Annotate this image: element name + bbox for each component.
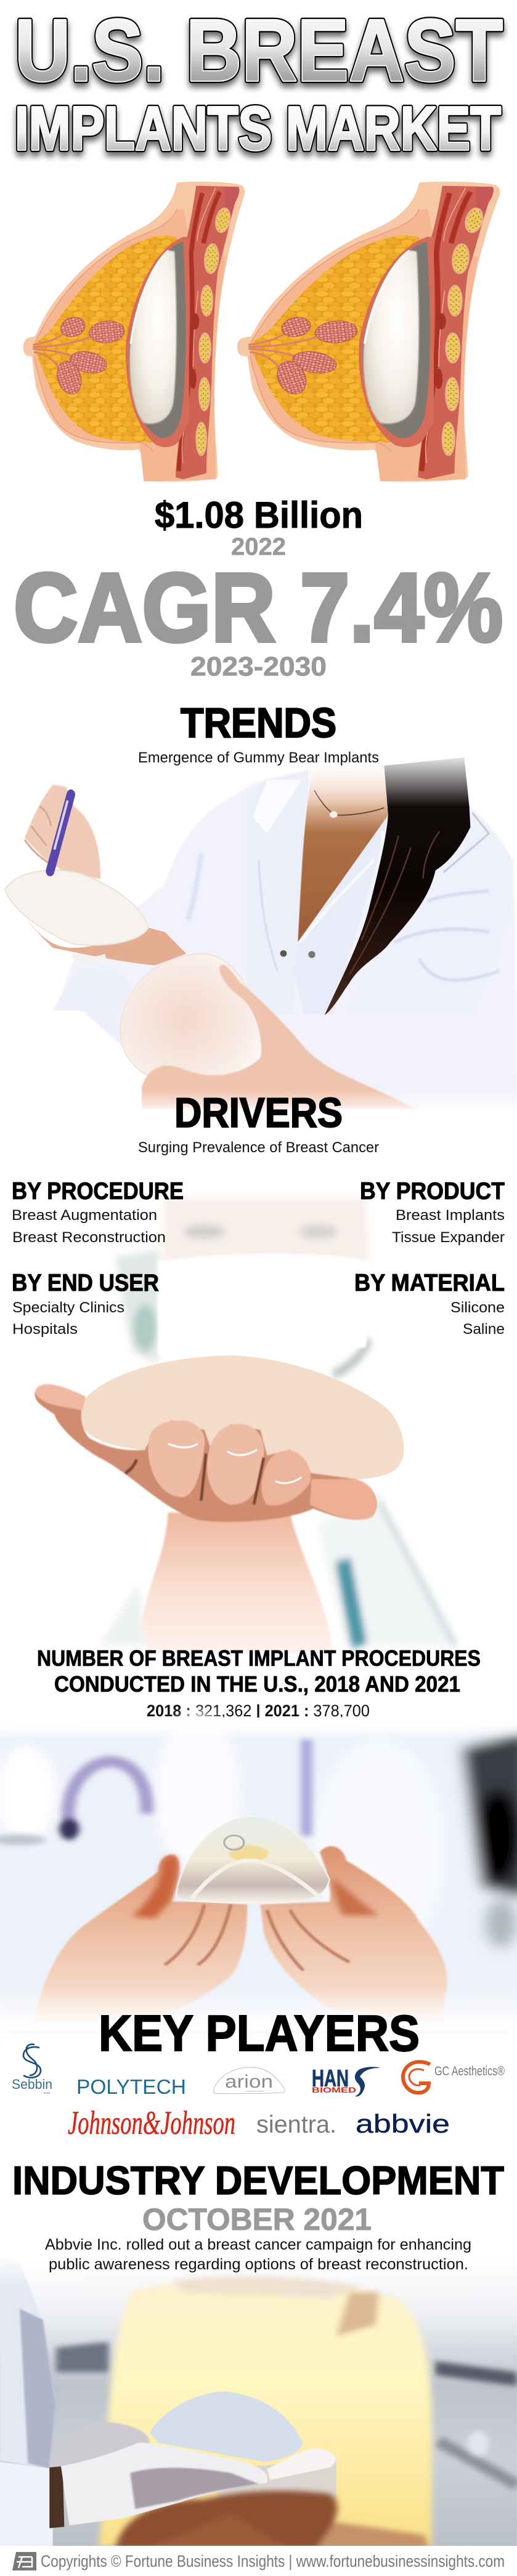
date: october 2021: OCTOBER 2021 <box>142 2202 372 2237</box>
segment: by material: Silicone <box>450 1299 505 1316</box>
segment: by material: Saline <box>463 1321 505 1338</box>
logo: Sebbin: Sebbin <box>12 2077 52 2092</box>
footer <box>12 2552 505 2570</box>
photo: gloved hand presenting implant to patient <box>0 2253 517 2576</box>
heading: industry development: INDUSTRY DEVELOPMENT <box>12 2158 504 2203</box>
icon: Fortune Business Insights logo <box>12 2552 36 2570</box>
heading: trends: TRENDS <box>181 700 336 746</box>
logo: Arion: arion <box>225 2072 273 2092</box>
development description: Abbvie Inc. rolled out a breast cancer campaign for enhancing <box>45 2236 471 2253</box>
logo: Hans Biomed: BIOMED <box>312 2086 357 2094</box>
logo: Arion: LABORATOIRES <box>245 2089 264 2093</box>
segment: by material <box>354 1270 505 1338</box>
heading: number of procedures: CONDUCTED IN THE U.S., 2018 AND 2021 <box>54 1671 460 1697</box>
segment: by procedure: Breast Augmentation <box>12 1207 157 1224</box>
title <box>15 2 503 163</box>
segment: by end user: BY END USER <box>12 1270 159 1296</box>
logo: Sebbin: PARIS <box>43 2091 51 2094</box>
logo: Sientra: sientra. <box>256 2111 336 2138</box>
stat: market size: $1.08 Billion <box>155 495 363 536</box>
heading: drivers: DRIVERS <box>174 1089 343 1136</box>
trend description: Emergence of Gummy Bear Implants <box>138 749 379 766</box>
photo: doctor holding implant <box>0 1198 517 1718</box>
segment: by end user: Specialty Clinics <box>12 1299 124 1316</box>
development description: public awareness regarding options of breast reconstruction. <box>49 2256 468 2273</box>
photo: hands holding transparent implant <box>0 1712 517 2031</box>
development description <box>45 2236 471 2273</box>
segment: by end user <box>12 1270 159 1338</box>
segment: by product <box>360 1178 505 1246</box>
logo: Polytech: POLYTECH <box>76 2075 186 2098</box>
logo: GC Aesthetics <box>403 2062 505 2093</box>
segment: by procedure: Breast Reconstruction <box>12 1229 166 1246</box>
driver description: Surging Prevalence of Breast Cancer <box>138 1139 379 1156</box>
segment: by end user: Hospitals <box>12 1321 78 1338</box>
segment: by procedure: BY PROCEDURE <box>12 1178 184 1205</box>
illustration: breast anatomy with implant, right <box>237 182 500 482</box>
stat: base year: 2022 <box>231 533 286 560</box>
logo: AbbVie: abbvie <box>356 2109 450 2138</box>
segment: by material: BY MATERIAL <box>354 1270 505 1296</box>
logo: Hans Biomed: HAN <box>312 2065 349 2092</box>
logo: Johnson & Johnson: Johnson&Johnson <box>68 2104 235 2141</box>
photo: woman holding implants <box>0 743 517 1134</box>
procedure counts: 2018 : 321,362 | 2021 : 378,700 <box>147 1702 370 1720</box>
segment: by procedure <box>12 1178 184 1246</box>
segment: by product: BY PRODUCT <box>360 1178 505 1205</box>
segment: by product: Breast Implants <box>396 1207 505 1224</box>
heading: number of procedures <box>37 1645 481 1697</box>
logo: Sebbin <box>12 2045 52 2094</box>
logo: Hans Biomed <box>312 2065 381 2096</box>
stat: forecast period: 2023-2030 <box>190 652 327 682</box>
segment: by product: Tissue Expander <box>392 1229 505 1246</box>
logo: Arion <box>214 2067 285 2094</box>
illustration: breast anatomy with implant, left <box>23 182 245 482</box>
heading: key players: KEY PLAYERS <box>99 2005 420 2062</box>
